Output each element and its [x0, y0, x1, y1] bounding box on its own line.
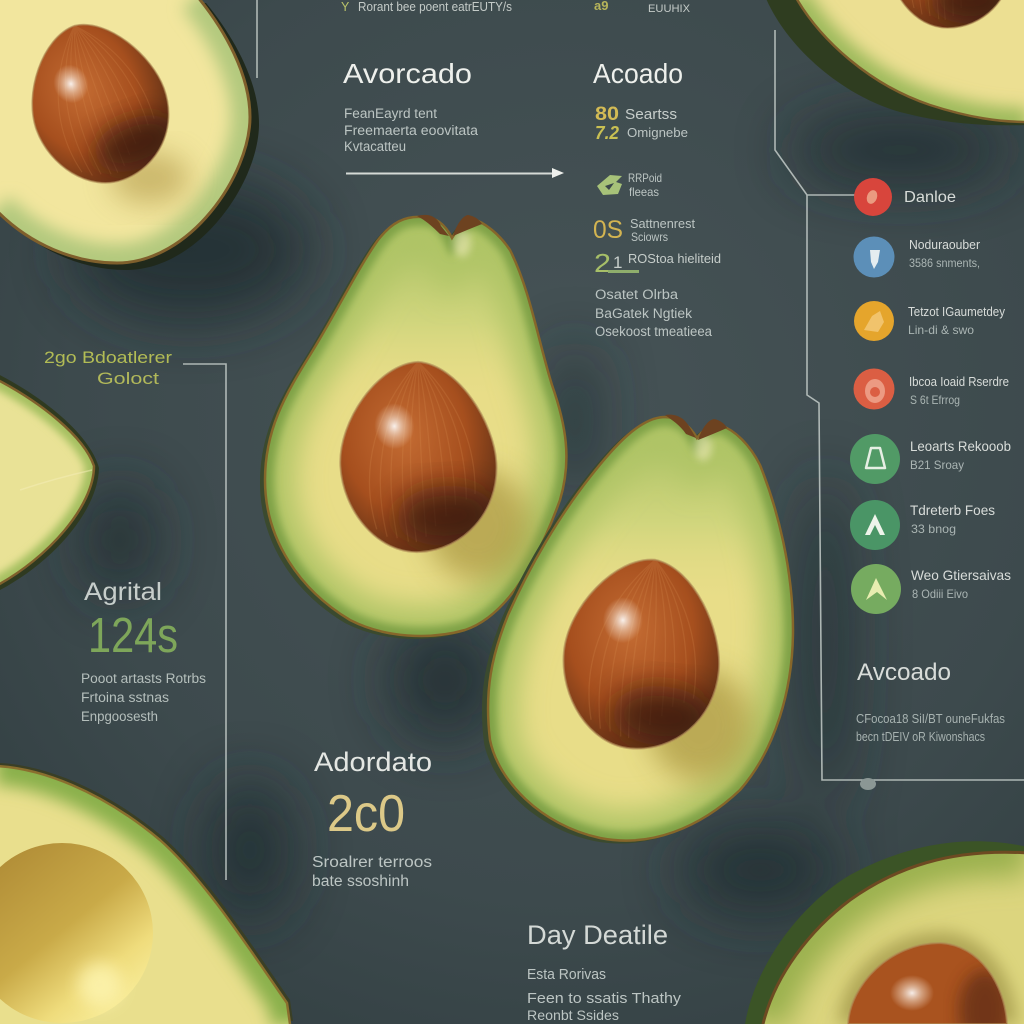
avocado: central lower half — [482, 415, 793, 844]
description — [344, 106, 479, 154]
stat 80: Seartss — [625, 107, 677, 123]
stat 80 — [595, 104, 677, 125]
avocado: bottom-left half with hollow — [0, 763, 293, 1024]
avocado: left-middle half — [0, 373, 99, 592]
callout: left golden label — [44, 348, 172, 388]
panel: Adordato stat — [312, 747, 432, 890]
seed — [556, 553, 728, 755]
top strip text: Y — [341, 0, 350, 14]
description: Pooot artasts Rotrbs — [81, 671, 206, 686]
item: light green A — [851, 564, 1011, 614]
legend list — [850, 178, 1011, 614]
description: Frtoina sstnas — [81, 690, 169, 705]
description: bate ssoshinh — [312, 873, 409, 890]
description: CFocoa18 SiI/BT ouneFukfas — [856, 712, 1005, 726]
description: Freemaerta eoovitata — [344, 123, 479, 138]
big number: 2c0 — [327, 785, 405, 843]
item: coral: S 6t Efrrog — [910, 393, 960, 407]
avocado: top-right half — [765, 0, 1024, 125]
avocado: top-left half — [0, 0, 259, 270]
item: red — [854, 178, 956, 216]
stat 05: 0S — [593, 216, 623, 244]
pit hollow — [0, 843, 153, 1023]
item: blue: Noduraouber — [909, 237, 981, 252]
arrow — [346, 168, 564, 178]
seed — [7, 4, 189, 202]
stat 05: Sattnenrest — [630, 217, 696, 231]
avocado: central upper half — [260, 215, 566, 639]
description: Feen to ssatis Thathy — [527, 990, 682, 1007]
item: red: Danloe — [904, 189, 956, 206]
description: FeanEayrd tent — [344, 106, 437, 121]
item: coral: Ibcoa Ioaid Rserdre — [909, 374, 1009, 389]
heading: Adordato — [314, 747, 432, 777]
seed — [888, 0, 1012, 28]
stat 05: Sciowrs — [631, 230, 668, 244]
leaf stat: fleeas — [629, 185, 659, 199]
stem notch — [417, 215, 482, 236]
heading: Acoado — [593, 58, 683, 89]
seed — [335, 358, 501, 556]
item: green A: 33 bnog — [911, 522, 956, 536]
notes: BaGatek Ngtiek — [595, 306, 692, 321]
panel: Day Deatile — [527, 920, 682, 1023]
item: green A: Tdreterb Foes — [910, 502, 995, 518]
item: light green A: 8 Odiii Eivo — [912, 587, 968, 601]
stat 80: 80 — [595, 104, 619, 125]
description: Enpgoosesth — [81, 709, 158, 724]
panel: Avcoado note — [856, 659, 1005, 744]
item: light green A: Weo Gtiersaivas — [911, 567, 1011, 583]
description — [527, 966, 682, 1023]
line end marker — [860, 778, 876, 790]
item: amber: Lin-di & swo — [908, 323, 974, 337]
notes: Osekoost tmeatieea — [595, 324, 712, 339]
panel: Acoado stats — [593, 58, 721, 339]
item: amber: Tetzot IGaumetdey — [908, 304, 1005, 319]
top strip text: Rorant bee poent eatrEUTY/s — [358, 0, 512, 14]
stat 72: 7.2 — [595, 123, 619, 143]
item: blue: 3586 snments, — [909, 256, 980, 270]
description: Kvtacatteu — [344, 139, 406, 154]
notes: Osatet Olrba — [595, 287, 679, 302]
stat 72: Omignebe — [627, 125, 688, 140]
stat 72 — [595, 123, 688, 143]
description — [856, 712, 1005, 744]
description: becn tDEIV oR Kiwonshacs — [856, 730, 985, 744]
big number: 124s — [88, 609, 178, 663]
stat 21: 1 — [613, 253, 622, 272]
leaf stat — [597, 171, 662, 199]
stat 21: 2 — [594, 248, 611, 278]
heading: Agrital — [84, 578, 162, 606]
heading: Avcoado — [857, 659, 951, 686]
notes — [595, 287, 712, 339]
callout: left golden label: Goloct — [97, 369, 159, 388]
description: Reonbt Ssides — [527, 1007, 619, 1023]
item: green bottle: Leoarts Rekooob — [910, 438, 1011, 454]
stat 05 — [593, 216, 696, 244]
item: amber — [854, 301, 1005, 341]
stem notch — [665, 415, 727, 440]
soft drop shadows — [70, 115, 1010, 920]
heading: Day Deatile — [527, 920, 668, 950]
item: blue — [854, 236, 981, 278]
description — [81, 671, 206, 724]
avocado: bottom-right half — [745, 841, 1024, 1024]
item: green A — [850, 500, 995, 550]
panel: Agrital stat — [81, 578, 206, 724]
top strip text — [341, 0, 691, 15]
top strip text: EUUHIX — [648, 3, 691, 15]
seed — [848, 943, 1011, 1024]
panel: Avorcado intro — [343, 58, 479, 154]
heading: Avorcado — [343, 58, 472, 89]
description: Sroalrer terroos — [312, 854, 432, 871]
callout: left golden label: 2go Bdoatlerer — [44, 348, 172, 367]
stat 21: ROStoa hieliteid — [628, 252, 721, 266]
connector lines — [183, 0, 1024, 880]
item: green bottle — [850, 434, 1011, 484]
item: coral — [854, 368, 1009, 410]
description — [312, 854, 432, 890]
stat 21 — [594, 248, 721, 278]
item: green bottle: B21 Sroay — [910, 458, 964, 472]
leaf stat: RRPoid — [628, 171, 662, 185]
description: Esta Rorivas — [527, 966, 606, 983]
